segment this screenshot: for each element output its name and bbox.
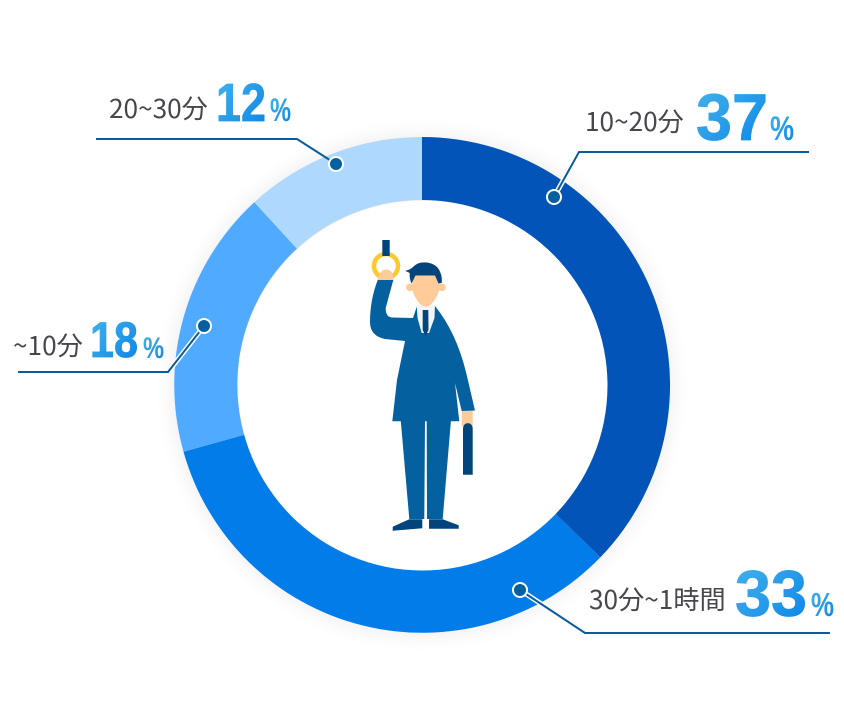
label: ~10 18%: ~10分 xyxy=(13,325,83,363)
hair xyxy=(405,262,442,284)
label: 20~30 12%: 12 xyxy=(216,73,266,133)
shoes xyxy=(393,519,459,531)
slice: ~10 min 18% xyxy=(174,202,297,452)
leader: ~10 xyxy=(18,319,211,372)
label: ~10 18% xyxy=(13,312,164,368)
leader: 30~1h xyxy=(513,583,830,633)
label: 20~30 12%: % xyxy=(270,92,291,128)
label: ~10 18%: % xyxy=(143,332,164,365)
slice: 20~30 min 12% xyxy=(254,137,422,249)
strap ring xyxy=(374,254,398,278)
icon: commuter holding a strap xyxy=(370,240,475,531)
label: 30~1h 33%: 30分~1時間 xyxy=(589,579,726,617)
strap xyxy=(382,240,390,256)
label: 10~20 37% xyxy=(585,80,794,154)
label: 20~30 12%: 20~30分 xyxy=(109,88,208,126)
label: 30~1h 33%: % xyxy=(811,586,834,623)
slice: 10~20 min 37% xyxy=(422,137,670,557)
tie xyxy=(423,310,428,336)
slice: 30 min~1 hour 33% xyxy=(184,435,600,633)
hand xyxy=(378,270,394,281)
donut chart xyxy=(174,137,670,633)
label: 10~20 37%: % xyxy=(770,110,794,148)
label: 30~1h 33% xyxy=(589,557,834,630)
donut shadow xyxy=(172,135,672,635)
shirt collar xyxy=(417,305,435,333)
leader: 10~20 xyxy=(547,152,809,204)
label: ~10 18%: 18 xyxy=(90,312,138,368)
legs xyxy=(401,420,451,519)
leader: 20~30 xyxy=(96,139,343,171)
label: 30~1h 33%: 33 xyxy=(735,557,807,630)
label: 20~30 12% xyxy=(109,73,291,133)
head xyxy=(405,262,446,306)
label: 10~20 37%: 37 xyxy=(696,80,768,154)
label: 10~20 37%: 10~20分 xyxy=(585,101,684,139)
jacket xyxy=(370,280,475,421)
left hand and briefcase xyxy=(462,409,473,426)
